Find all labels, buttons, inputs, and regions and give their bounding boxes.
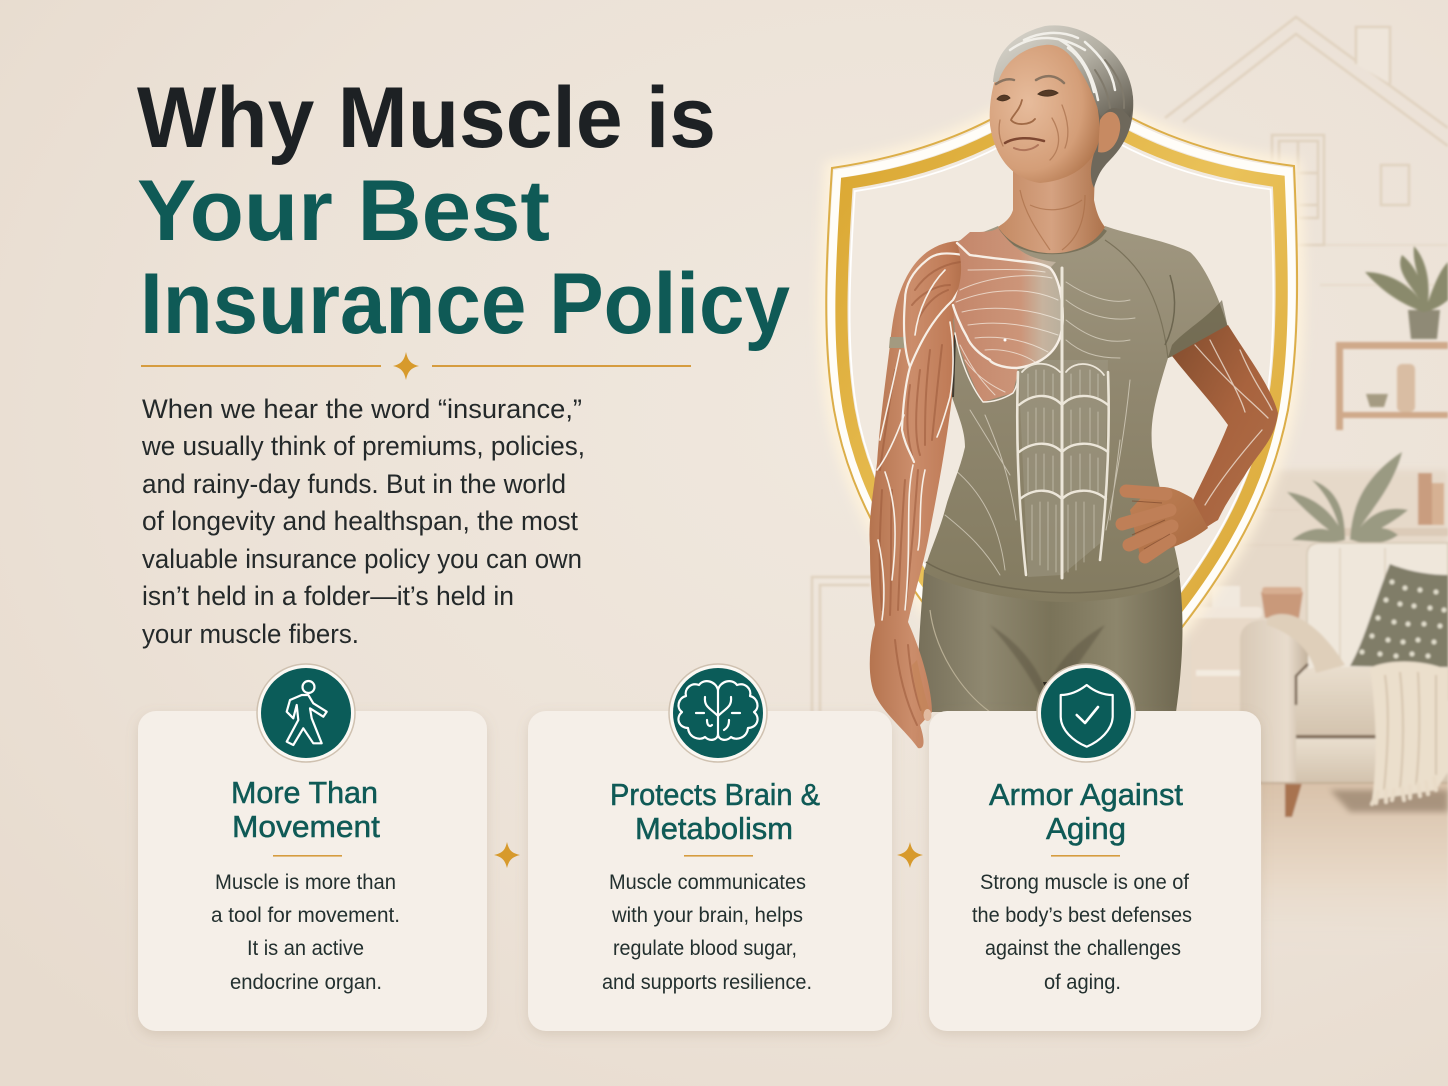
shield gold band: [841, 93, 1282, 737]
intro paragraph: and rainy-day funds. But in the world: [142, 469, 566, 499]
shield glow: [826, 72, 1297, 760]
intro paragraph: your muscle fibers.: [142, 619, 359, 649]
panel: armor against aging: [929, 664, 1261, 1031]
card body text: [602, 871, 812, 994]
card heading: More Than: [231, 775, 378, 810]
gold shield emblem: [826, 72, 1297, 760]
hair: [993, 25, 1133, 118]
floor and sofa shadow: [1261, 782, 1448, 960]
neck: [998, 140, 1105, 253]
background: home interior illustration: [812, 17, 1448, 960]
house outline: [812, 17, 1448, 712]
arm muscle fibres: [880, 262, 960, 725]
upper wall shelf with plant: [1336, 246, 1448, 430]
card heading: Movement: [232, 809, 380, 844]
card body text: endocrine organ.: [230, 971, 382, 994]
throw blanket: [1370, 662, 1448, 804]
star separator: [494, 842, 520, 868]
shield white band: [832, 80, 1291, 751]
card body text: [211, 871, 400, 994]
abdominal muscle lines: [945, 268, 1135, 578]
right arm muscles and hand on hip: [1122, 325, 1278, 557]
title divider with star: [141, 352, 691, 380]
patterned cushion: [1350, 564, 1448, 668]
title: Insurance Policy: [140, 256, 790, 352]
shirt: [924, 226, 1228, 602]
armpit shadow: [953, 335, 955, 397]
card body text: Muscle is more than: [215, 871, 396, 894]
card body text: It is an active: [247, 937, 364, 960]
card body text: against the challenges: [985, 937, 1181, 960]
star separator: [897, 842, 923, 868]
intro paragraph: isn’t held in a folder—it’s held in: [142, 581, 514, 611]
left arm with muscles: [869, 241, 975, 748]
card heading: [989, 777, 1183, 846]
sleeve band: [889, 337, 906, 348]
hair back: [1050, 29, 1133, 188]
side table, jar and pot: [1184, 586, 1303, 711]
leggings: [918, 565, 1182, 712]
card heading: [610, 777, 820, 846]
title: [137, 70, 790, 352]
potted plant and lower shelf: [1287, 452, 1448, 543]
lower wall tint: [1170, 470, 1448, 785]
card heading: Armor Against: [989, 777, 1183, 812]
intro paragraph: When we hear the word “insurance,”: [142, 394, 582, 424]
title: Your Best: [137, 163, 550, 259]
ear: [1098, 112, 1120, 153]
card heading: [231, 775, 380, 844]
card body text: with your brain, helps: [611, 904, 803, 927]
head and face: [990, 25, 1133, 188]
intro paragraph: [141, 394, 585, 649]
facial features: [996, 76, 1068, 160]
intro paragraph: of longevity and healthspan, the most: [142, 506, 579, 536]
shield outer line: [826, 72, 1297, 760]
card body text: [972, 871, 1192, 994]
card body text: of aging.: [1044, 971, 1121, 994]
card heading: Aging: [1046, 811, 1126, 846]
panel: more than movement: [138, 664, 487, 1031]
card body text: regulate blood sugar,: [613, 937, 797, 960]
card heading: Protects Brain &: [610, 777, 820, 812]
card body text: a tool for movement.: [211, 904, 400, 927]
card body text: and supports resilience.: [602, 971, 812, 994]
card heading: Metabolism: [635, 811, 793, 846]
woman with visible muscle anatomy: [869, 25, 1278, 748]
chest muscle overlay: [953, 228, 1063, 402]
icon: brain: [669, 664, 767, 762]
card body text: the body’s best defenses: [972, 904, 1192, 927]
panel: protects brain and metabolism: [528, 664, 892, 1031]
icon: walking person: [257, 664, 355, 762]
sofa with cushion and throw: [1240, 543, 1448, 817]
icon: shield with check: [1037, 664, 1135, 762]
intro paragraph: valuable insurance policy you can own: [142, 544, 582, 574]
card body text: Muscle communicates: [609, 871, 806, 894]
intro paragraph: we usually think of premiums, policies,: [141, 431, 585, 461]
card body text: Strong muscle is one of: [980, 871, 1189, 894]
shield inner line: [850, 105, 1273, 724]
title: Why Muscle is: [137, 70, 716, 166]
